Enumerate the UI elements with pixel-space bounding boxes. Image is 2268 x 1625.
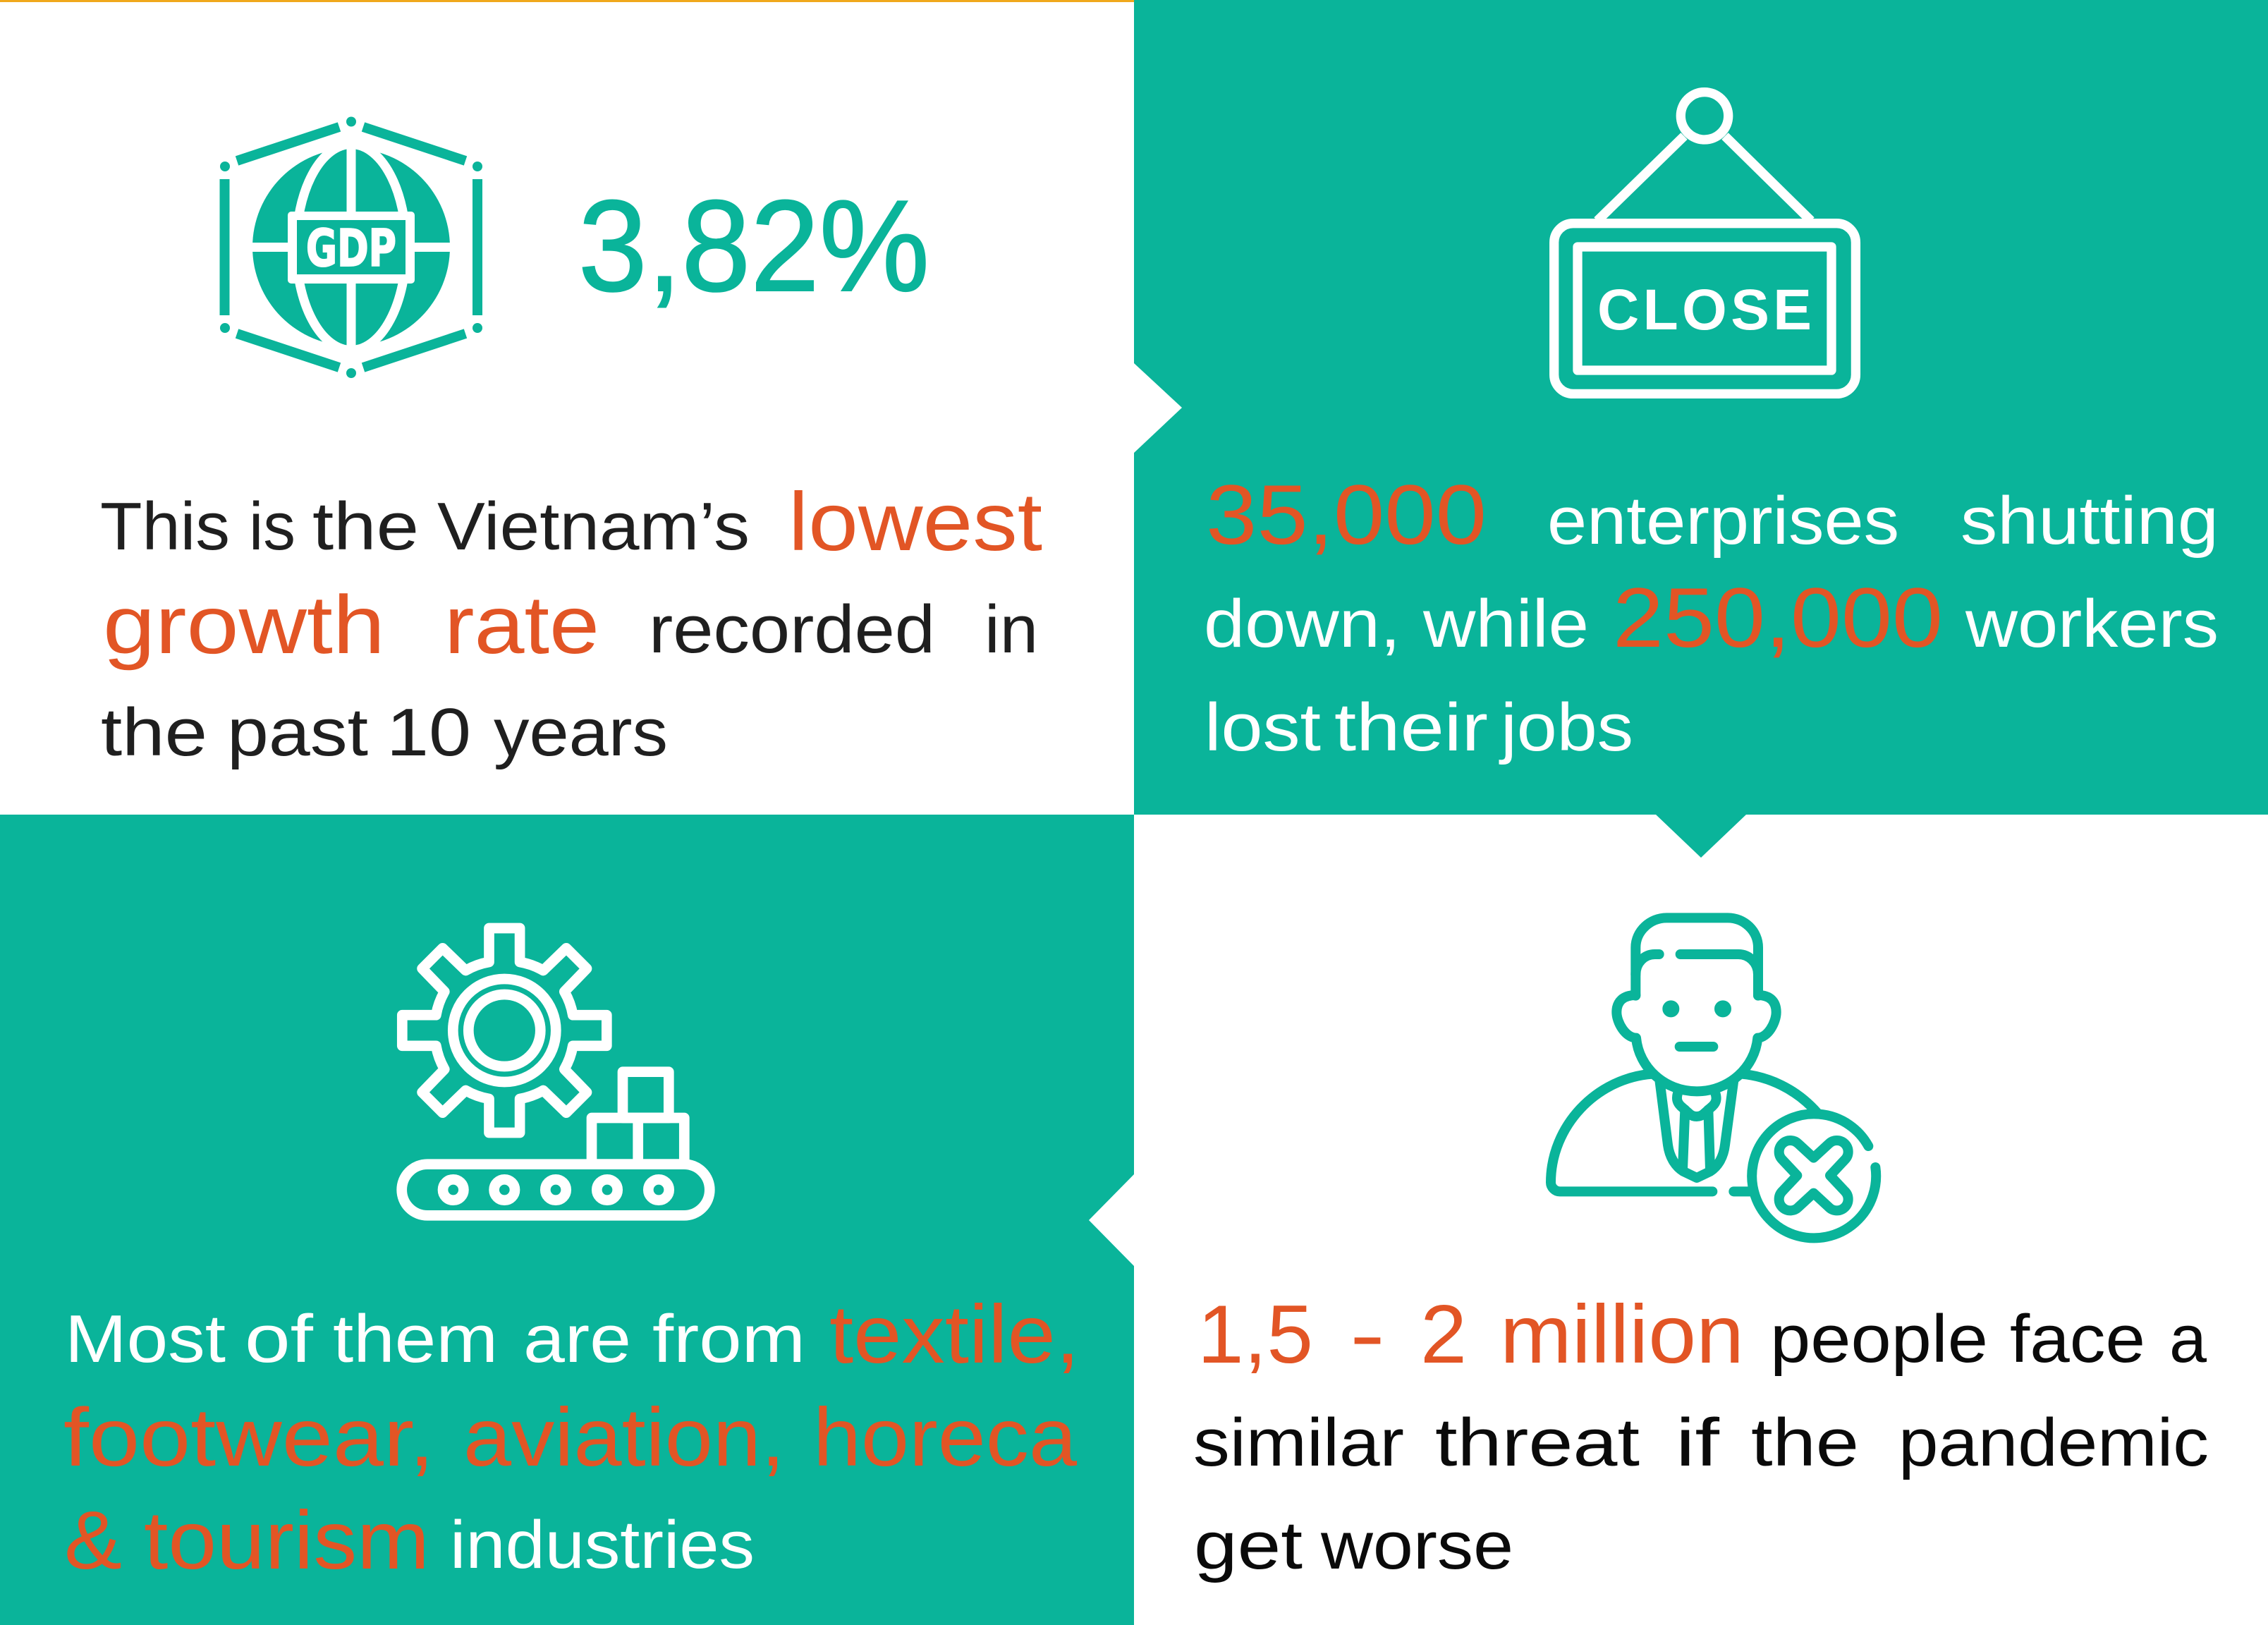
icon: close sign: CLOSE <box>1597 278 1812 342</box>
text block: 1,5 - 2 million: 2 <box>1420 1288 1467 1380</box>
panel: GDP growth <box>100 117 1042 770</box>
text block: lowest growth rate: is <box>249 489 295 564</box>
text block: 35,000 enterprises: while <box>1422 586 1589 662</box>
text block: lowest growth rate: This <box>100 489 230 564</box>
panel: enterprises closing <box>1134 0 2268 858</box>
text block: 1,5 - 2 million: if <box>1676 1405 1719 1480</box>
text block: lowest growth rate: Vietnam’s <box>437 489 750 564</box>
text block: lowest growth rate <box>100 475 1042 770</box>
text block: 1,5 - 2 million <box>1193 1288 2209 1583</box>
panel background with white arrow notch <box>0 815 1134 1625</box>
text block: 1,5 - 2 million: people <box>1770 1301 1988 1377</box>
text block: industries: of <box>245 1301 313 1377</box>
text block: lowest growth rate: years <box>494 695 668 770</box>
top accent line <box>0 0 1134 2</box>
icon: GDP globe <box>220 117 482 378</box>
panel: jobs at risk <box>1193 918 2209 1583</box>
text block: lowest growth rate: growth <box>103 578 385 671</box>
text block: 35,000 enterprises: enterprises <box>1547 483 1899 559</box>
text block: industries: tourism <box>144 1494 429 1586</box>
text block: 35,000 enterprises: shutting <box>1961 483 2219 559</box>
panel: affected industries <box>0 815 1134 1625</box>
text block: 35,000 enterprises <box>1204 468 2219 765</box>
text block: lowest growth rate: 10 <box>386 695 471 770</box>
text block: 35,000 enterprises: down, <box>1204 586 1401 662</box>
text block: 1,5 - 2 million: 1,5 <box>1197 1288 1313 1380</box>
text block: 35,000 enterprises: 250,000 <box>1613 571 1943 665</box>
text block: 35,000 enterprises: workers <box>1965 586 2219 662</box>
text block: lowest growth rate: the <box>312 489 419 564</box>
text block: 1,5 - 2 million: worse <box>1320 1508 1513 1583</box>
text block: industries: footwear, <box>63 1391 434 1483</box>
text block: industries: Most <box>65 1301 226 1377</box>
text block: industries: aviation, <box>463 1391 785 1483</box>
text block: 1,5 - 2 million: face <box>2010 1301 2145 1377</box>
text block: 35,000 enterprises: their <box>1334 690 1488 765</box>
text block: industries: & <box>64 1494 122 1586</box>
text block: 1,5 - 2 million: similar <box>1193 1405 1404 1480</box>
text block: industries: from <box>652 1301 805 1377</box>
text block: lowest growth rate: recorded <box>649 592 935 667</box>
icon: worker with cross <box>1551 918 1876 1238</box>
text block: industries: industries <box>450 1507 755 1583</box>
text block: 1,5 - 2 million: million <box>1500 1288 1744 1380</box>
icon: close sign <box>1554 92 1855 394</box>
text block: industries: them <box>333 1301 498 1377</box>
icon: GDP globe: GDP <box>306 219 396 278</box>
text block: lowest growth rate: in <box>984 592 1038 667</box>
text block: 1,5 - 2 million: get <box>1194 1508 1303 1583</box>
text block: 1,5 - 2 million: threat <box>1435 1405 1640 1480</box>
text block: lowest growth rate: rate <box>444 578 599 671</box>
text block: 35,000 enterprises: 35,000 <box>1206 468 1487 562</box>
text block: 1,5 - 2 million: pandemic <box>1898 1405 2209 1480</box>
text block: 1,5 - 2 million: a <box>2169 1301 2207 1377</box>
text block: 1,5 - 2 million: the <box>1751 1405 1859 1480</box>
icon: gear and conveyor <box>402 928 709 1215</box>
text block: lowest growth rate: past <box>227 695 368 770</box>
text block: 1,5 - 2 million: - <box>1350 1288 1385 1380</box>
text block: 35,000 enterprises: lost <box>1205 690 1321 765</box>
text block: industries: textile, <box>829 1288 1080 1380</box>
text block: lowest growth rate: the <box>101 695 207 770</box>
text block: 35,000 enterprises: jobs <box>1499 690 1633 765</box>
text block: lowest growth rate: lowest <box>788 475 1042 568</box>
stat: 3,82%: 3,82% <box>578 173 929 318</box>
panel background with white arrow notch <box>1134 0 2268 858</box>
text block: industries <box>63 1288 1080 1586</box>
text block: industries: horeca <box>813 1391 1078 1483</box>
text block: industries: are <box>523 1301 631 1377</box>
